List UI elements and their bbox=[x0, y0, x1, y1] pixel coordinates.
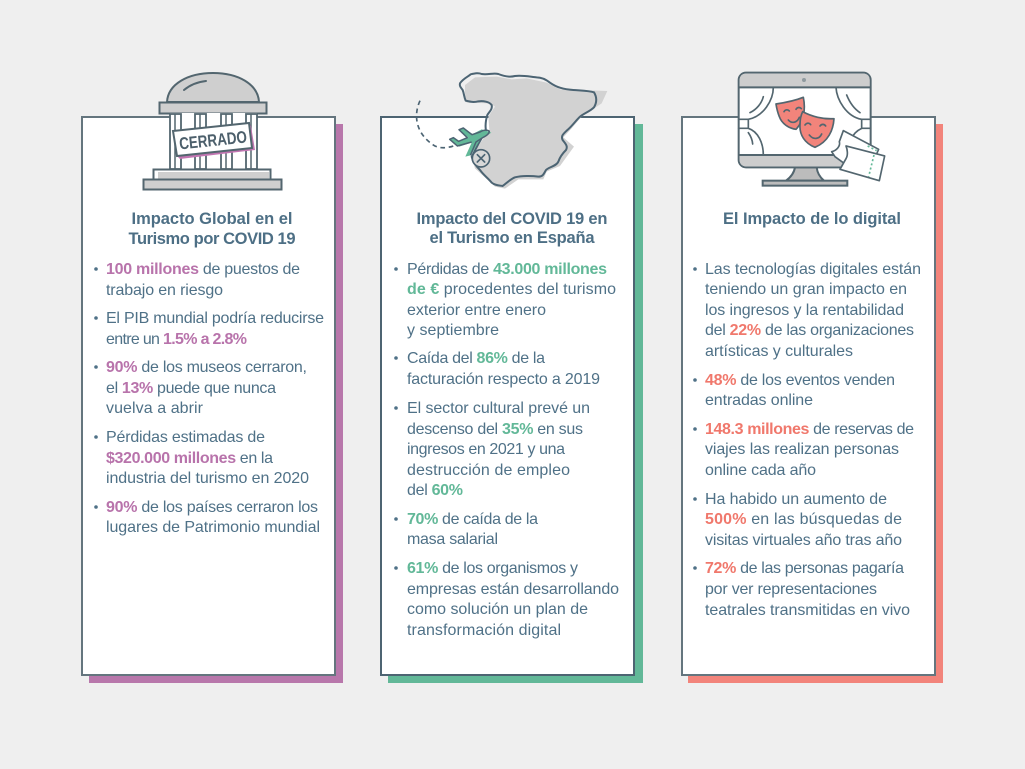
bullet list: descenso del 35% en sus bbox=[407, 421, 583, 438]
bullet list: el 13% puede que nunca bbox=[106, 380, 276, 397]
bullet list: 70% de caída de la bbox=[407, 511, 538, 528]
bullet list: teatrales transmitidas en vivo bbox=[705, 602, 910, 619]
panel: Impacto digital bbox=[682, 73, 943, 683]
bullet list: por ver representaciones bbox=[705, 581, 877, 598]
bullet list: online cada año bbox=[705, 462, 816, 479]
bullet list: Pérdidas estimadas de bbox=[106, 429, 265, 446]
bullet list: industria del turismo en 2020 bbox=[106, 470, 309, 487]
icon: map of Spain with plane bbox=[417, 73, 607, 189]
heading: Impacto Global en el bbox=[132, 210, 292, 228]
bullet list: transformación digital bbox=[407, 622, 561, 639]
bullet list: artísticas y culturales bbox=[705, 343, 853, 360]
bullet list: lugares de Patrimonio mundial bbox=[106, 519, 320, 536]
panel: Impacto en España bbox=[381, 73, 643, 683]
bullet list: vuelva a abrir bbox=[106, 400, 204, 417]
bullet list: 90% de los museos cerraron, bbox=[106, 359, 307, 376]
bullet list: ingresos en 2021 y una bbox=[407, 441, 565, 458]
card shadow coral bbox=[688, 124, 943, 683]
bullet list: masa salarial bbox=[407, 531, 498, 548]
bullet list: entradas online bbox=[705, 392, 813, 409]
bullet list: Ha habido un aumento de bbox=[705, 491, 887, 508]
bullet list: teniendo un gran impacto en bbox=[705, 281, 907, 298]
bullet list: El PIB mundial podría reducirse bbox=[106, 310, 324, 327]
heading: Turismo por COVID 19 bbox=[128, 230, 296, 248]
heading: El Impacto de lo digital bbox=[723, 210, 901, 228]
bullet list: entre un 1.5% a 2.8% bbox=[106, 331, 247, 348]
card bbox=[682, 117, 935, 675]
bullet list bbox=[394, 261, 619, 639]
heading: Impacto del COVID 19 en bbox=[416, 210, 608, 228]
heading: el Turismo en España bbox=[430, 229, 595, 247]
bullet list: 61% de los organismos y bbox=[407, 560, 578, 577]
bullet list: Caída del 86% de la bbox=[407, 350, 545, 367]
bullet list: del 60% bbox=[407, 482, 463, 499]
bullet list: Las tecnologías digitales están bbox=[705, 261, 921, 278]
mask back bbox=[776, 97, 804, 129]
card bbox=[381, 117, 634, 675]
bullet list: visitas virtuales año tras año bbox=[705, 532, 902, 549]
card shadow green bbox=[388, 124, 643, 683]
tickets bbox=[832, 131, 879, 170]
bullet list: y septiembre bbox=[407, 322, 499, 339]
bullet list: viajes las realizan personas bbox=[705, 441, 899, 458]
bullet list: facturación respecto a 2019 bbox=[407, 371, 600, 388]
card shadow purple bbox=[89, 124, 343, 683]
bullet list: exterior entre enero bbox=[407, 302, 546, 319]
bullet list: trabajo en riesgo bbox=[106, 282, 223, 299]
bullet list: como solución un plan de bbox=[407, 601, 588, 618]
bullet list: 48% de los eventos venden bbox=[705, 372, 895, 389]
bullet list bbox=[94, 261, 324, 536]
panel: Impacto Global bbox=[82, 73, 343, 683]
bullet list: 72% de las personas pagaría bbox=[705, 560, 904, 577]
bullet list: 500% en las búsquedas de bbox=[705, 511, 902, 528]
bullet list bbox=[693, 261, 921, 619]
bullet list: los ingresos y la rentabilidad bbox=[705, 302, 904, 319]
icon: monitor with masks and tickets bbox=[739, 73, 885, 186]
bullet list: del 22% de las organizaciones bbox=[705, 322, 914, 339]
bullet list: El sector cultural prevé un bbox=[407, 400, 590, 417]
bullet list: 90% de los países cerraron los bbox=[106, 499, 318, 516]
label: CERRADO: CERRADO bbox=[178, 127, 248, 153]
bullet list: destrucción de empleo bbox=[407, 462, 570, 479]
bullet list: empresas están desarrollando bbox=[407, 581, 619, 598]
mask front bbox=[800, 112, 834, 147]
icon: plane bbox=[450, 128, 491, 157]
card bbox=[82, 117, 335, 675]
bullet list: Pérdidas de 43.000 millones bbox=[407, 261, 607, 278]
bullet list: 148.3 millones de reservas de bbox=[705, 421, 914, 438]
bullet list: $320.000 millones en la bbox=[106, 450, 273, 467]
icon: closed museum bbox=[144, 73, 282, 190]
bullet list: 100 millones de puestos de bbox=[106, 261, 300, 278]
bullet list: de € procedentes del turismo bbox=[407, 281, 616, 298]
